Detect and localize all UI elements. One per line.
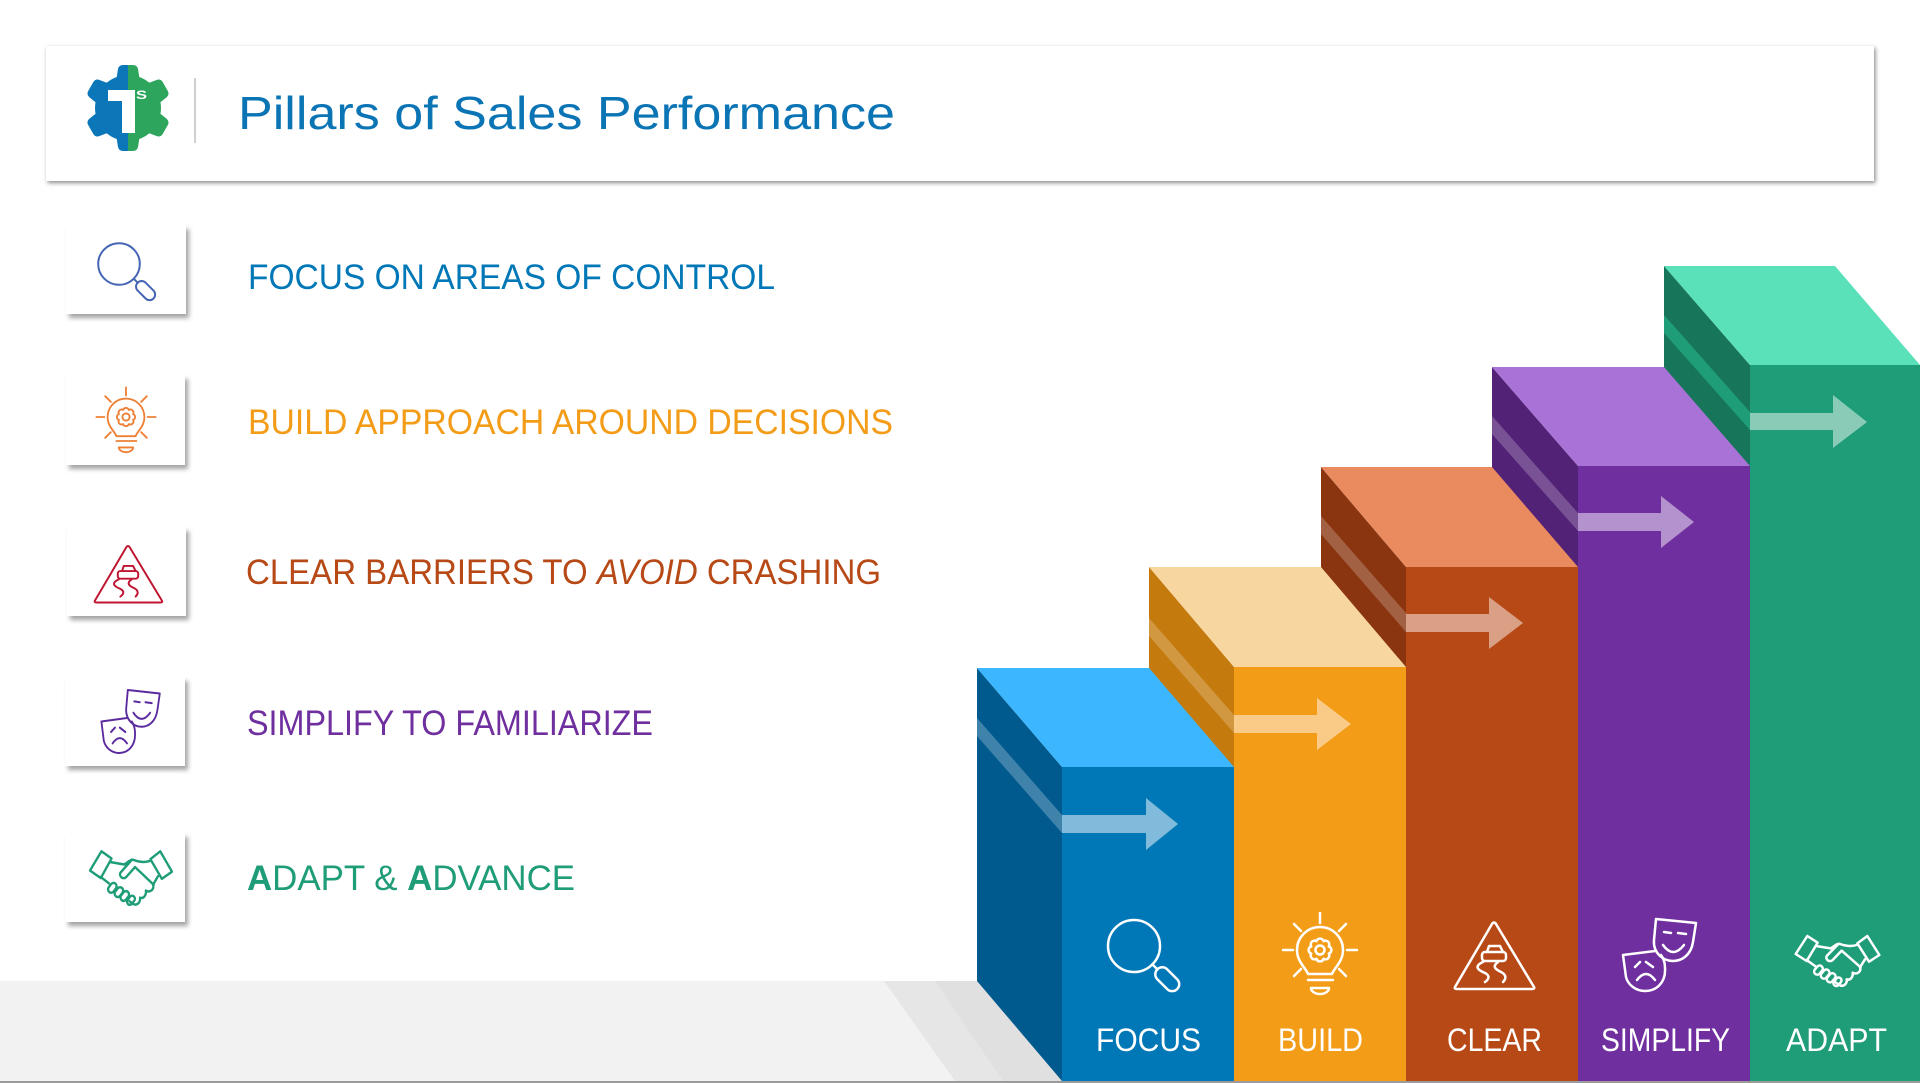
statement: focus: FOCUS ON AREAS OF CONTROL: [248, 258, 775, 297]
pillar: build: [1149, 567, 1406, 1081]
icon card: build: [66, 375, 185, 465]
pillar: adapt: [1664, 266, 1920, 1081]
pillar label: build: BUILD: [1278, 1022, 1363, 1058]
pillar label: adapt: ADAPT: [1786, 1022, 1887, 1058]
icon card: simplify: [65, 677, 185, 766]
pillar: simplify: [1492, 367, 1750, 1081]
pillar: clear: [1321, 467, 1578, 1081]
pillar label: simplify: SIMPLIFY: [1601, 1022, 1730, 1058]
statement: simplify: SIMPLIFY TO FAMILIARIZE: [247, 704, 653, 743]
pillar label: focus: FOCUS: [1096, 1022, 1201, 1058]
pillar label: clear: CLEAR: [1447, 1022, 1542, 1058]
arrow: focus: [1062, 798, 1178, 850]
icon: slippery road sign: [95, 546, 162, 602]
pillar icon: light bulb: [1283, 913, 1357, 994]
header panel: [46, 46, 1874, 181]
bottom rule: [0, 1081, 1920, 1083]
icon card: adapt: [65, 833, 185, 922]
icon: light bulb: [96, 387, 156, 452]
icon: magnifier: [98, 243, 157, 302]
pillar icon: magnifier: [1108, 920, 1182, 994]
arrow: build: [1234, 698, 1351, 750]
title: Pillars of Sales Performance: [238, 87, 895, 139]
arrow: adapt: [1750, 395, 1867, 448]
icon card: focus: [66, 225, 186, 314]
icon card: clear: [67, 527, 186, 616]
pillar icon: theatre masks: [1623, 919, 1696, 991]
icon: handshake: [90, 851, 172, 906]
arrow: simplify: [1578, 496, 1694, 548]
header divider: [194, 78, 196, 143]
icon: theatre masks: [101, 690, 160, 753]
logo: S: [136, 88, 147, 102]
pillar icon: slippery road sign: [1455, 922, 1534, 989]
floor: [0, 981, 1062, 1081]
arrow: clear: [1406, 597, 1523, 649]
pillar icon: handshake: [1796, 936, 1879, 987]
pillar: focus: [977, 668, 1234, 1081]
statement: build: BUILD APPROACH AROUND DECISIONS: [248, 403, 893, 442]
statement: adapt: ADAPT & ADVANCE: [247, 859, 575, 898]
logo: [84, 65, 172, 151]
statement: clear: CLEAR BARRIERS TO AVOID CRASHING: [246, 553, 881, 592]
